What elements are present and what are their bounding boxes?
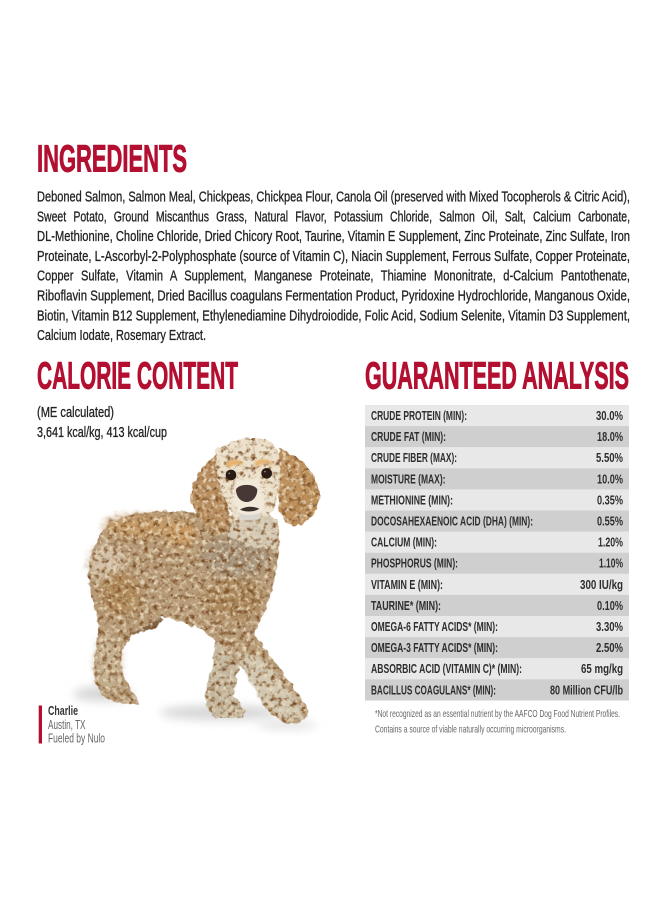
dog face — [226, 459, 274, 520]
guaranteed analysis table: ABSORBIC ACID (VITAMIN C)* (MIN): — [371, 661, 522, 676]
guaranteed analysis table — [365, 405, 629, 700]
calorie content text: 3,641 kcal/kg, 413 kcal/cup — [37, 424, 167, 441]
heading: calorie content: CALORIE CONTENT — [37, 356, 238, 398]
guaranteed analysis table: CRUDE PROTEIN (MIN): — [371, 408, 467, 423]
guaranteed analysis table: OMEGA-3 FATTY ACIDS* (MIN): — [371, 640, 498, 655]
caption line: Fueled by Nulo — [48, 732, 105, 746]
guaranteed analysis table: 3.30% — [596, 619, 623, 634]
guaranteed analysis table: CRUDE FAT (MIN): — [371, 429, 446, 444]
guaranteed analysis table: MOISTURE (MAX): — [371, 471, 446, 486]
guaranteed analysis table: TAURINE* (MIN): — [371, 598, 441, 613]
caption: dog name — [39, 704, 105, 746]
guaranteed analysis table: 1.20% — [598, 535, 623, 550]
dog photo illustration — [73, 438, 320, 729]
guaranteed analysis table: 18.0% — [597, 429, 623, 444]
guaranteed analysis table: BACILLUS COAGULANS* (MIN): — [371, 682, 496, 697]
guaranteed analysis table: 1.10% — [599, 556, 623, 571]
guaranteed analysis table: METHIONINE (MIN): — [371, 492, 453, 507]
guaranteed analysis table: DOCOSAHEXAENOIC ACID (DHA) (MIN): — [371, 514, 533, 528]
guaranteed analysis table: VITAMIN E (MIN): — [371, 577, 443, 592]
caption name: Charlie — [48, 704, 78, 718]
calorie content text — [37, 404, 167, 441]
guaranteed analysis table: 300 IU/kg — [580, 577, 623, 592]
guaranteed analysis table: PHOSPHORUS (MIN): — [371, 556, 458, 571]
guaranteed analysis table: CRUDE FIBER (MAX): — [371, 450, 457, 465]
guaranteed analysis table: 2.50% — [596, 640, 623, 655]
ingredients text block — [37, 188, 630, 344]
ingredients text block: Calcium Iodate, Rosemary Extract. — [37, 327, 206, 344]
guaranteed analysis table: 65 mg/kg — [581, 661, 623, 676]
guaranteed analysis table: 30.0% — [596, 408, 623, 423]
guaranteed analysis table: OMEGA-6 FATTY ACIDS* (MIN): — [371, 619, 498, 634]
guaranteed analysis table: 10.0% — [597, 471, 623, 486]
guaranteed analysis table: 0.55% — [597, 514, 623, 528]
caption location: Austin, TX — [48, 718, 86, 732]
heading: ingredients: INGREDIENTS — [37, 138, 187, 180]
footnote — [375, 708, 620, 736]
calorie content text: (ME calculated) — [37, 404, 114, 421]
guaranteed analysis table: 0.10% — [597, 598, 623, 613]
guaranteed analysis table: 80 Million CFU/lb — [550, 682, 623, 697]
guaranteed analysis table: 0.35% — [597, 492, 623, 507]
guaranteed analysis table: 5.50% — [596, 450, 623, 465]
guaranteed analysis table: CALCIUM (MIN): — [371, 535, 437, 550]
caption accent bar — [39, 706, 42, 744]
